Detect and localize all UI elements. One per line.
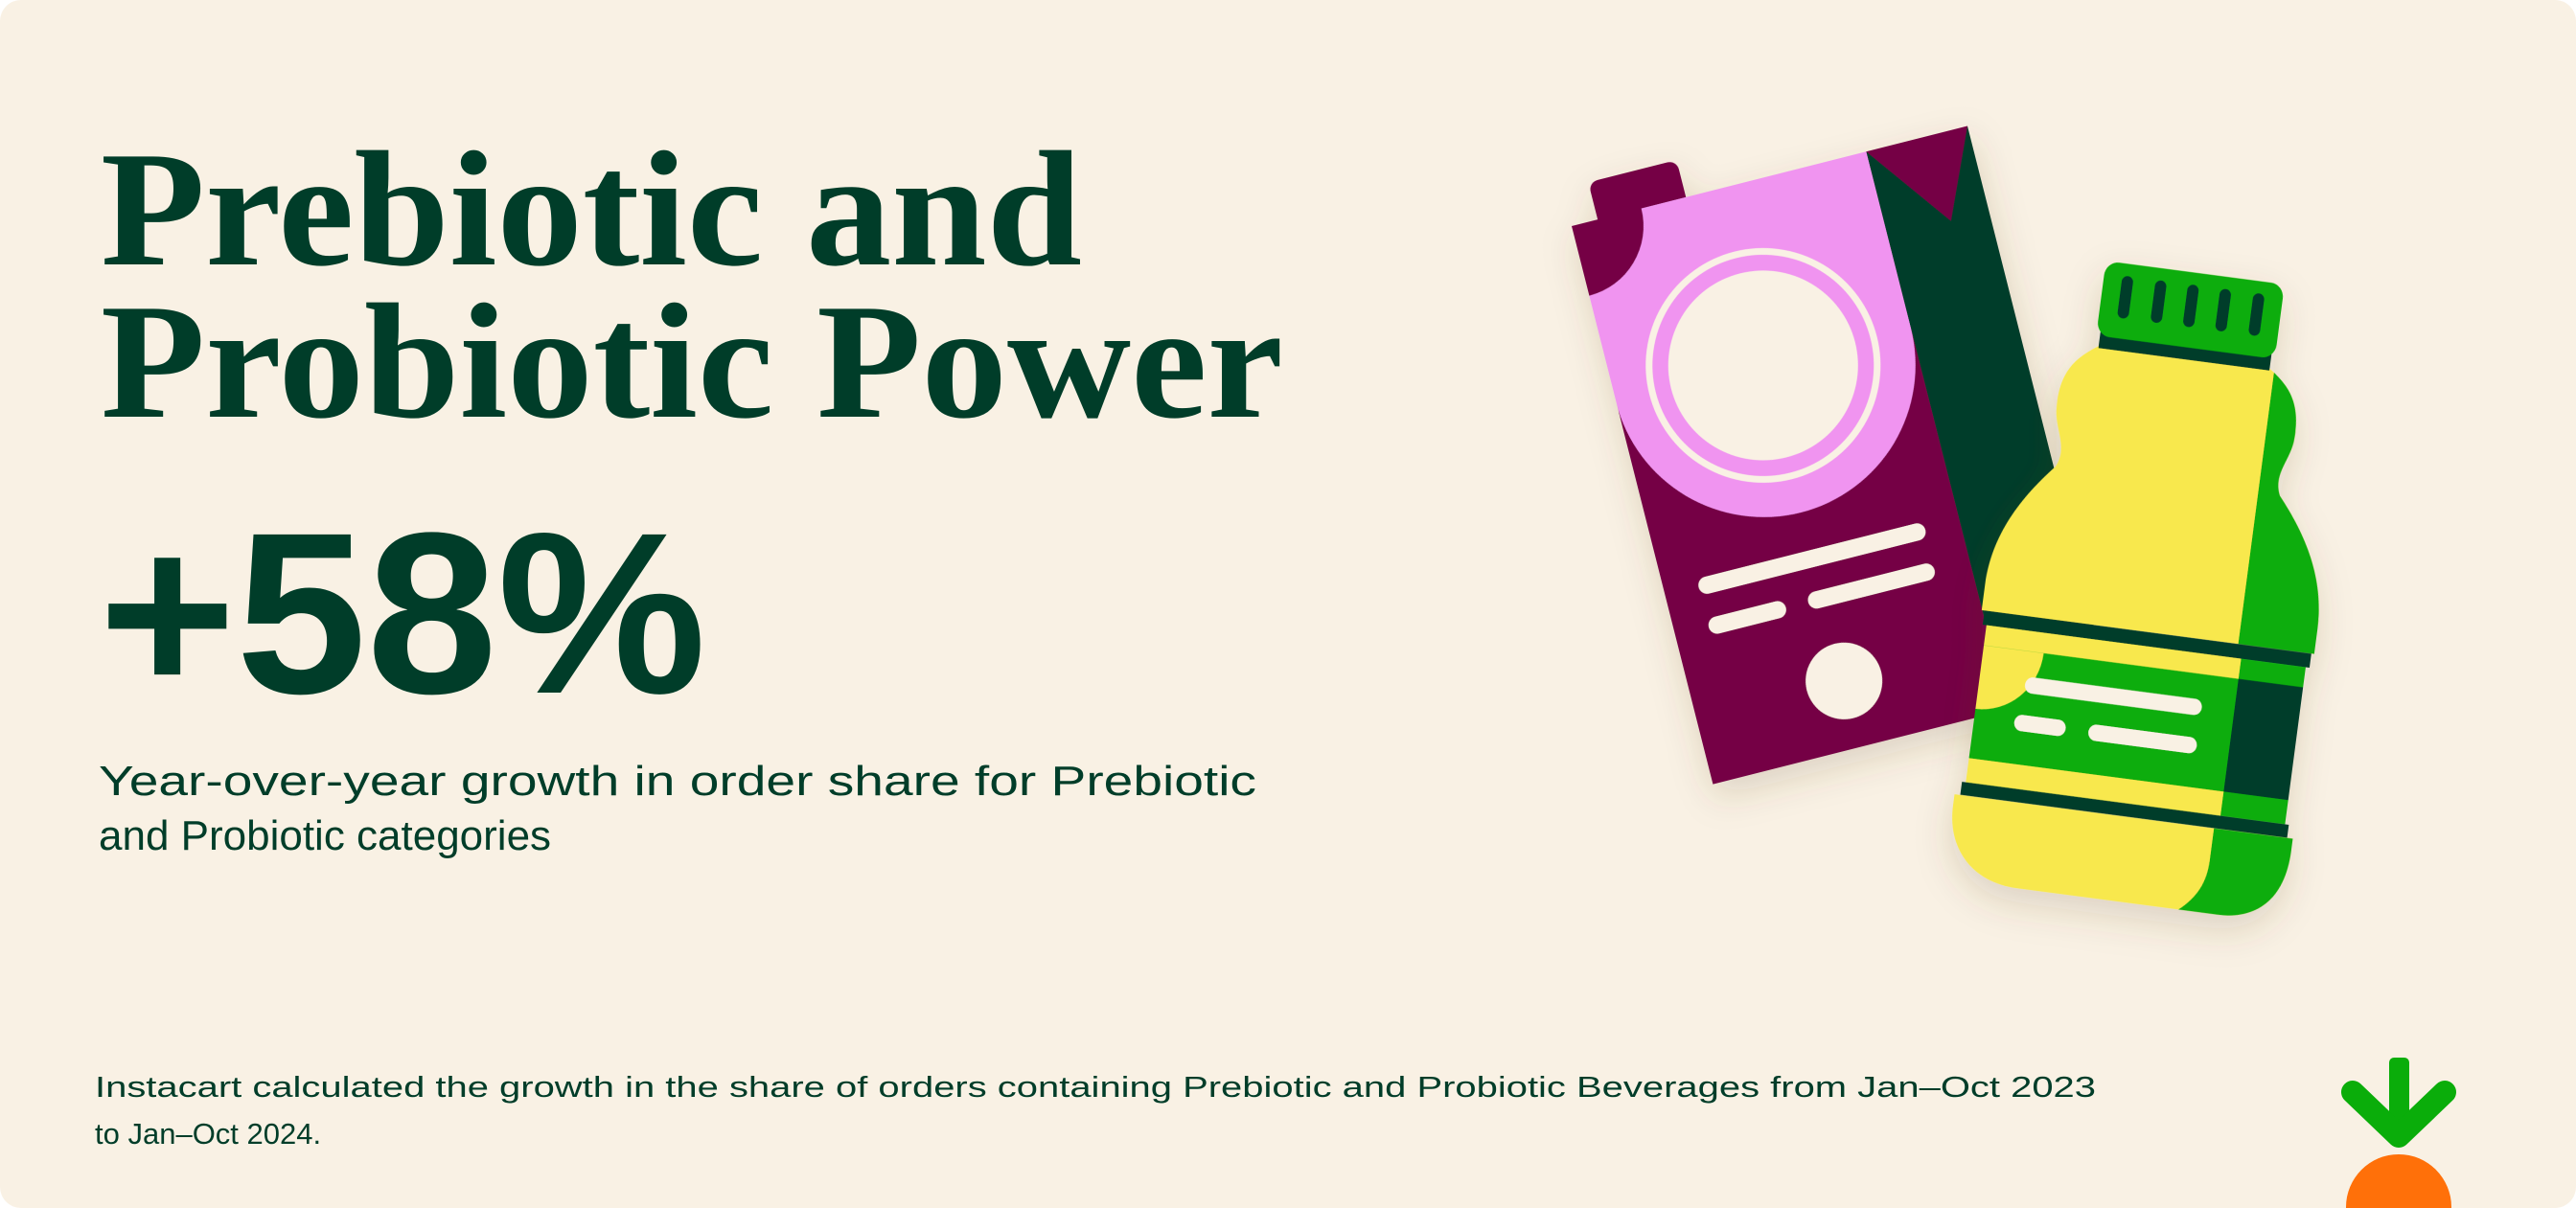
stat description: and Probiotic categories bbox=[99, 812, 551, 859]
footnote: to Jan–Oct 2024. bbox=[95, 1117, 321, 1151]
bottle neck band bbox=[2099, 331, 2271, 371]
bottle cap bbox=[2096, 261, 2285, 359]
illustration: bottle bbox=[1938, 262, 2331, 943]
stat: +58%: +58% bbox=[99, 485, 706, 741]
illustration: carton bbox=[1568, 126, 2094, 805]
footnote bbox=[95, 1070, 2096, 1151]
title: Probiotic Power bbox=[101, 271, 1283, 453]
stat description bbox=[99, 758, 1256, 859]
bottle bottom bbox=[1938, 793, 2300, 943]
carton side panel bbox=[1866, 125, 2108, 710]
logo: instacart carrot bbox=[2346, 1058, 2451, 1208]
title bbox=[101, 119, 1283, 453]
footnote: Instacart calculated the growth in the share of orders containing Prebiotic and Probiotic Beverages from Jan–Oct 2023 bbox=[95, 1070, 2096, 1104]
carton label circle bbox=[1624, 227, 1901, 504]
title: Prebiotic and bbox=[101, 119, 1082, 301]
carton tab bbox=[1588, 160, 1690, 239]
stat description: Year-over-year growth in order share for Prebiotic bbox=[99, 758, 1256, 805]
carton text lines bbox=[1707, 532, 1927, 625]
bottle upper body bbox=[1982, 326, 2331, 674]
bottle label bbox=[1960, 610, 2312, 838]
